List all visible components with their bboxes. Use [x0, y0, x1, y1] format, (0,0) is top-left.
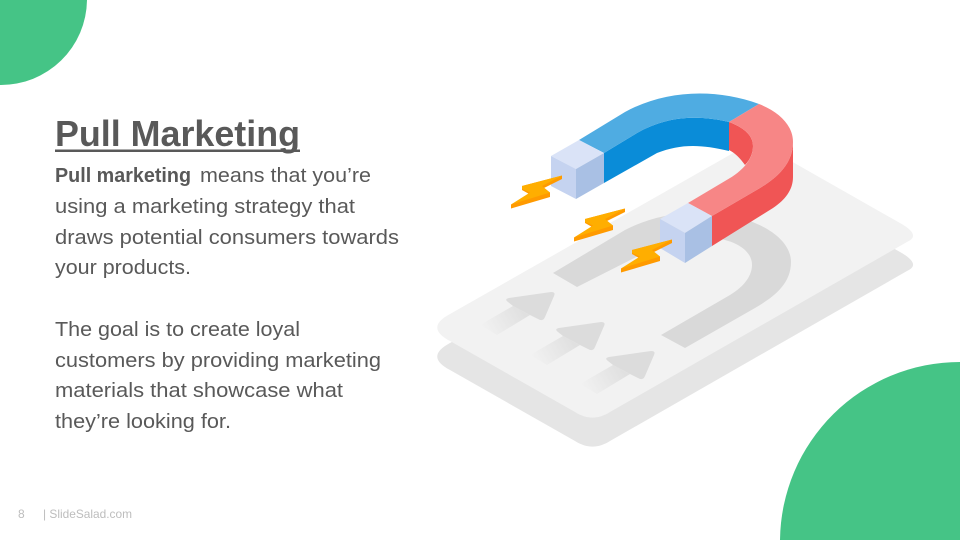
title: Pull Marketing: [55, 113, 300, 154]
magnet shadow: [553, 213, 791, 348]
text block: definition of pull marketing: draws potential consumers towards: [55, 227, 399, 249]
decorative circle: bottom-right green: [780, 362, 960, 540]
lightning bolt 2: [574, 208, 625, 242]
red arm inner side: [729, 122, 753, 165]
blue arm top: [579, 94, 759, 153]
magnet: [551, 94, 793, 263]
text block: definition of pull marketing: Pull marketing: [55, 165, 191, 187]
blue pole block: [551, 140, 604, 199]
text block: definition of pull marketing: [55, 165, 399, 279]
arrow 2: [530, 322, 605, 365]
text block: goal of pull marketing: The goal is to create loyal: [55, 319, 300, 341]
text block: goal of pull marketing: they’re looking for.: [55, 411, 231, 433]
footer: 8: [18, 507, 25, 521]
lower plate: [437, 173, 913, 447]
lightning bolt 3: [621, 240, 672, 272]
text block: definition of pull marketing: using a marketing strategy that: [55, 196, 355, 218]
arrow 3: [580, 351, 655, 394]
text block: definition of pull marketing: your products.: [55, 257, 191, 279]
red arm top: [688, 104, 793, 216]
illustration: magnet pulling arrows: [437, 94, 913, 447]
blue arm side: [604, 118, 729, 183]
text block: goal of pull marketing: [55, 319, 381, 433]
red arm outer side: [712, 142, 793, 246]
red pole block: [660, 203, 712, 263]
text block: definition of pull marketing: means that you’re: [200, 165, 371, 187]
text block: goal of pull marketing: customers by providing marketing: [55, 350, 381, 372]
decorative circle: top-left green: [0, 0, 87, 85]
arrow 1: [480, 292, 555, 335]
text block: goal of pull marketing: materials that showcase what: [55, 380, 343, 402]
upper plate: [437, 144, 913, 418]
footer: | SlideSalad.com: [43, 507, 132, 521]
lightning bolt 1: [511, 176, 562, 208]
